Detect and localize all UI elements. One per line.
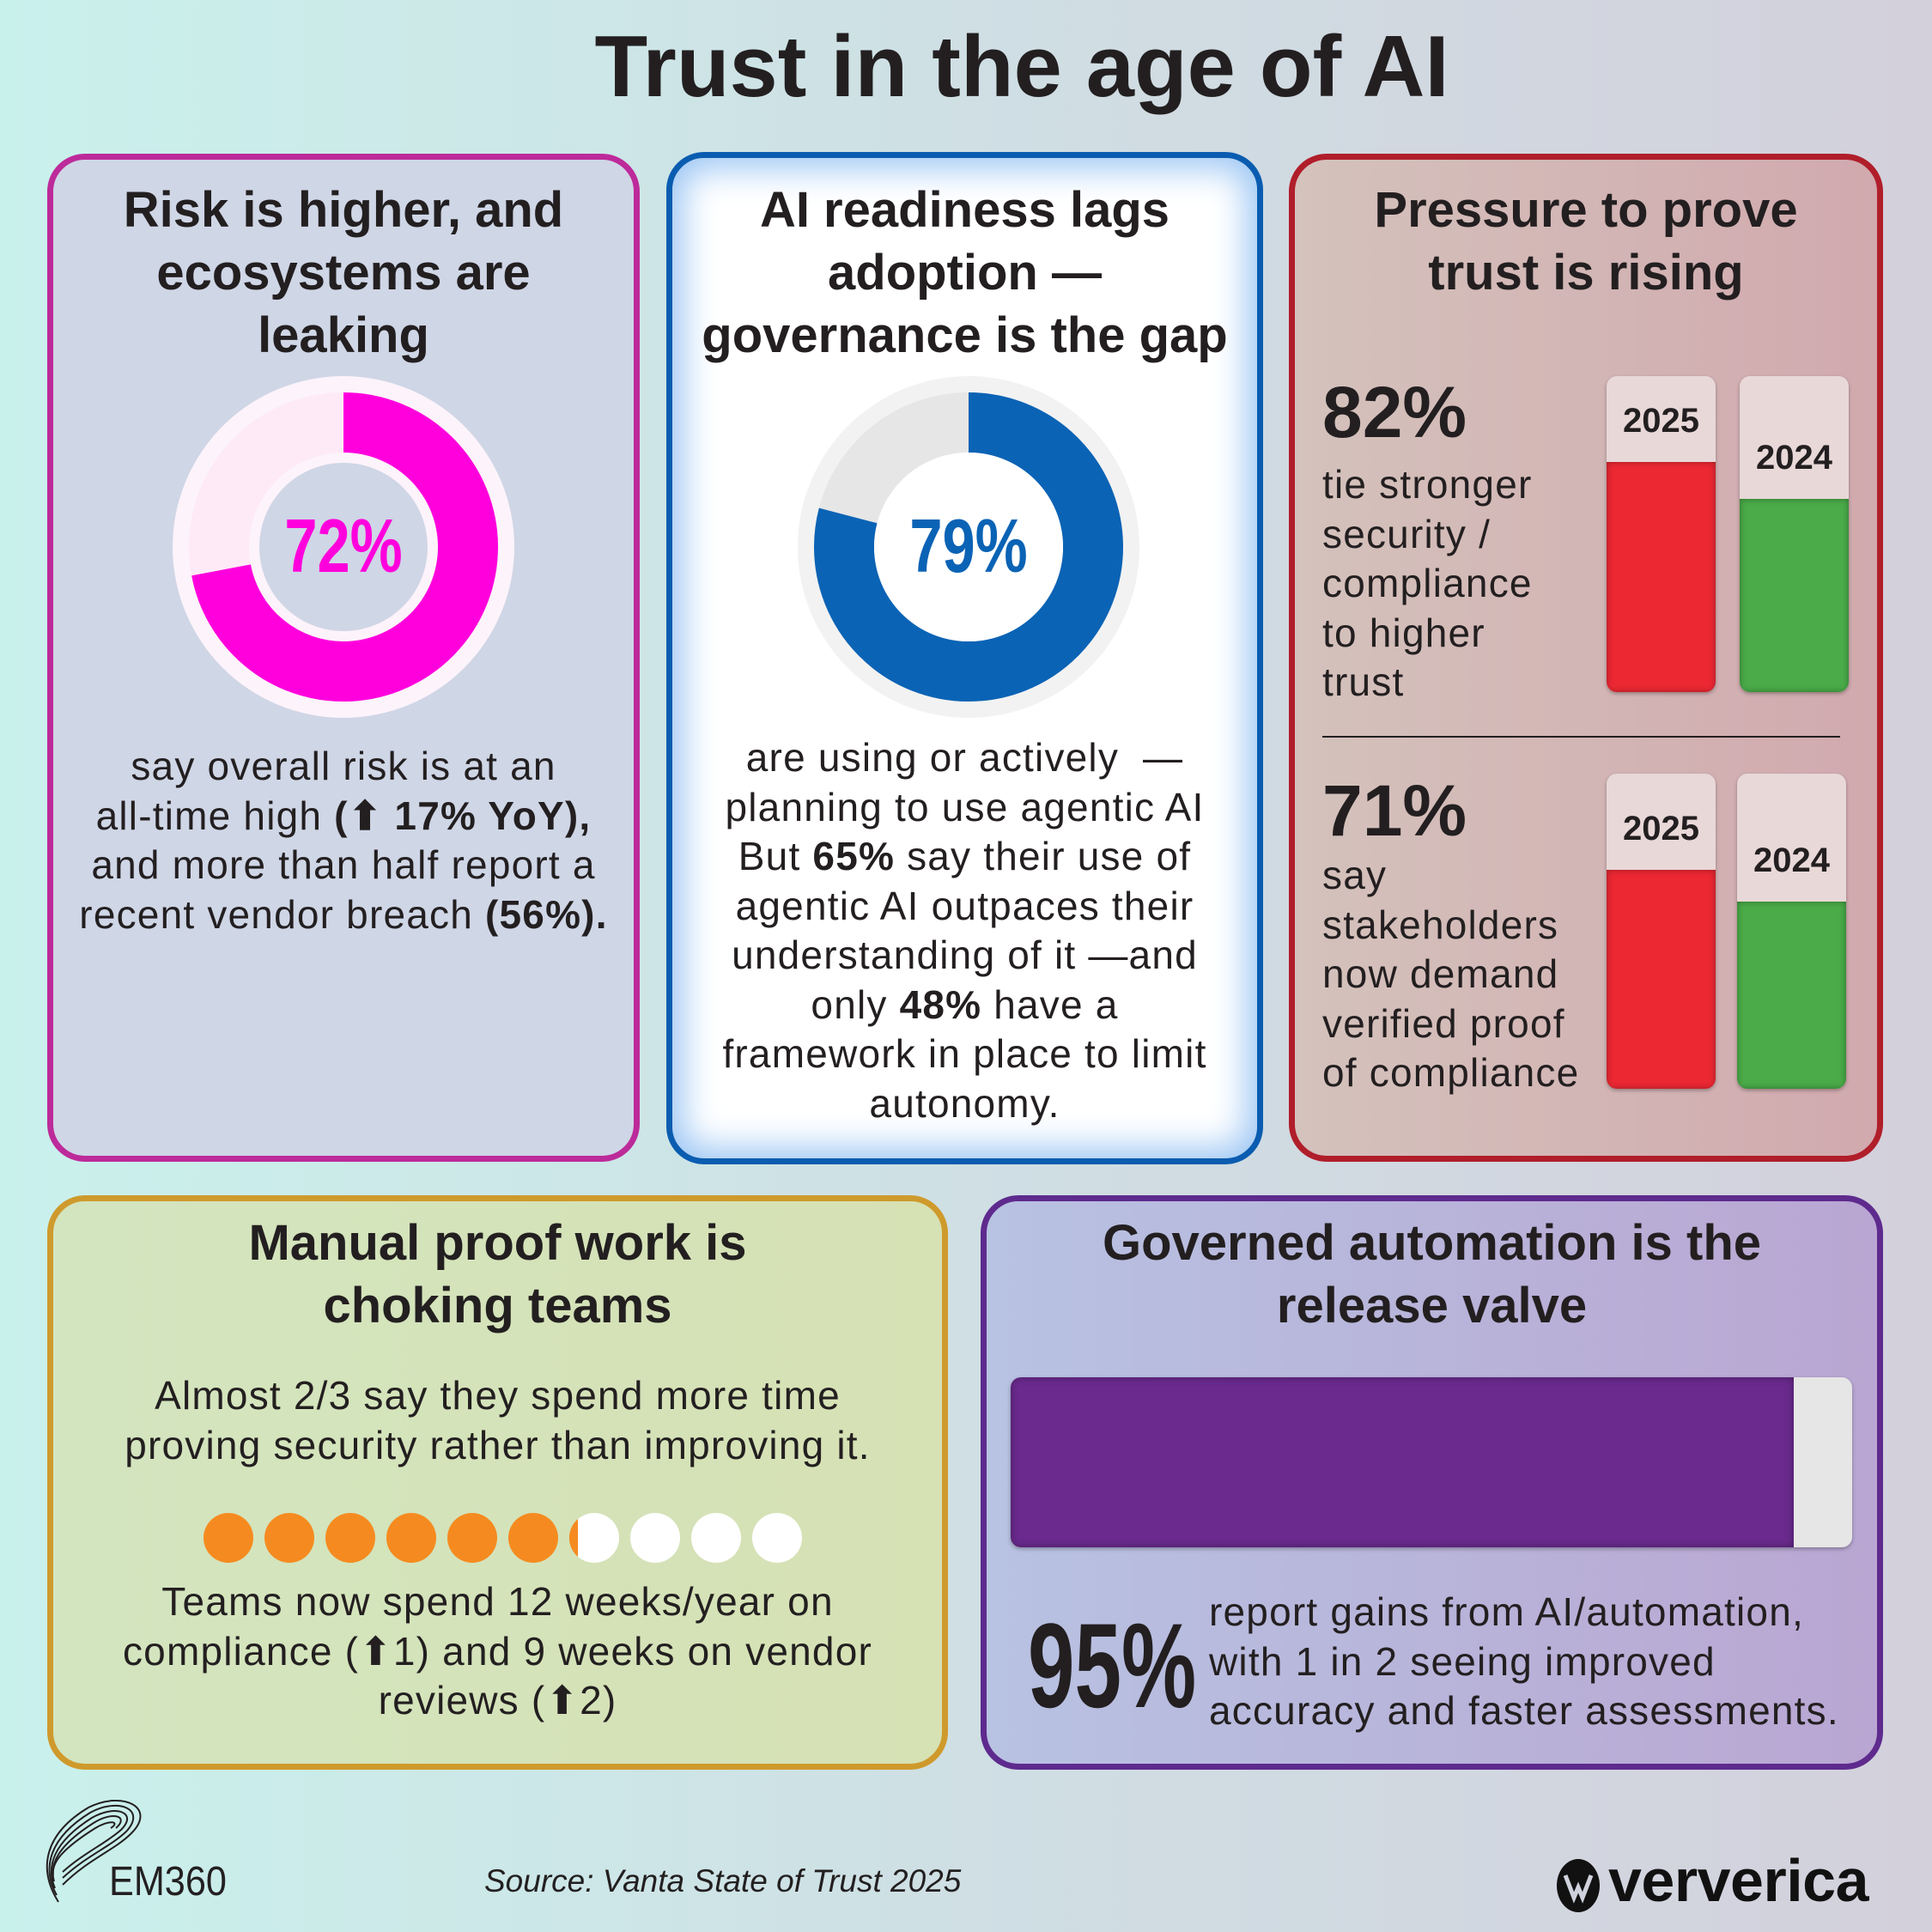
text: 71% description: verified proof <box>1322 1001 1565 1046</box>
text: AI readiness stats: framework in place to limit <box>722 1031 1207 1076</box>
text: risk stats: all-time high (⬆ 17% YoY), <box>96 793 591 838</box>
panel: AI readiness <box>666 152 1263 1164</box>
title: Trust in the age of AI <box>594 19 1449 115</box>
text: AI readiness stats <box>722 735 1207 1125</box>
text: 71% description: of compliance <box>1322 1050 1579 1095</box>
text: automation gains: report gains from AI/automation, <box>1209 1589 1804 1634</box>
text: weeks spent: compliance (⬆1) and 9 weeks on vendor <box>123 1628 872 1673</box>
bar: 2024 <box>1740 376 1849 692</box>
heading: risk: leaking <box>258 307 429 363</box>
text: 82% description: trust <box>1322 659 1404 704</box>
logo: EM360 <box>46 1800 227 1905</box>
donut chart 72%: 72% <box>284 504 403 588</box>
text: AI readiness stats: planning to use agentic AI <box>725 785 1205 829</box>
bar: 2024 (second): 2024 <box>1753 841 1830 879</box>
text: AI readiness stats: But 65% say their use of <box>738 834 1191 878</box>
text: 82% description: tie stronger <box>1322 462 1533 507</box>
text: AI readiness stats: only 48% have a <box>811 982 1119 1027</box>
heading: risk: Risk is higher, and <box>124 182 563 238</box>
heading: AI readiness: adoption — <box>828 245 1102 301</box>
text: 82% description <box>1322 462 1533 704</box>
panel: governed automation <box>981 1195 1883 1770</box>
panel: manual proof <box>47 1195 948 1770</box>
text: proving security <box>125 1373 871 1467</box>
heading: manual proof: Manual proof work is <box>248 1215 747 1271</box>
donut chart 79% <box>798 376 1139 718</box>
text: AI readiness stats: agentic AI outpaces their <box>736 883 1194 927</box>
logo: EM360: EM360 <box>109 1859 227 1905</box>
bar: 2024 (second) <box>1737 774 1846 1089</box>
bar: 2025 (82%): 2025 <box>1623 402 1699 440</box>
text: risk stats: and more than half report a <box>91 842 596 887</box>
text: automation gains <box>1209 1589 1839 1733</box>
text: 71% description <box>1322 853 1579 1095</box>
text: 71% description: say <box>1322 853 1387 897</box>
bar: 2025 (71%): 2025 <box>1623 810 1699 848</box>
text: 82% description: to higher <box>1322 610 1485 654</box>
text: weeks spent <box>123 1579 872 1722</box>
heading: manual proof: choking teams <box>323 1278 672 1334</box>
heading: pressure: trust is rising <box>1428 245 1744 301</box>
text: 71% description: stakeholders <box>1322 902 1558 946</box>
heading: risk: ecosystems are <box>156 245 531 301</box>
text: AI readiness stats: autonomy. <box>869 1080 1060 1125</box>
text: AI readiness stats: understanding of it —and <box>732 933 1198 977</box>
donut chart 72% <box>173 376 514 718</box>
stat 82%: 82% <box>1322 372 1467 453</box>
text: risk stats: say overall risk is at an <box>131 744 556 788</box>
text: 82% description: security / <box>1322 512 1491 556</box>
text: automation gains: accuracy and faster assessments. <box>1209 1688 1839 1733</box>
heading: governed automation: release valve <box>1277 1278 1587 1334</box>
heading: pressure <box>1374 182 1798 301</box>
bar chart 95% <box>1011 1377 1852 1547</box>
stat 71%: 71% <box>1322 770 1467 851</box>
stat 95%: 95% <box>1028 1598 1196 1733</box>
source text: Source: Vanta State of Trust 2025 <box>484 1863 961 1899</box>
heading: manual proof <box>248 1215 747 1334</box>
text: risk stats <box>79 744 608 936</box>
text: weeks spent: Teams now spend 12 weeks/year on <box>161 1579 834 1624</box>
heading: pressure: Pressure to prove <box>1374 182 1798 238</box>
text: weeks spent: reviews (⬆2) <box>379 1678 617 1722</box>
text: AI readiness stats: are using or actively — <box>746 735 1183 780</box>
heading: AI readiness <box>702 182 1228 363</box>
text: automation gains: with 1 in 2 seeing improved <box>1209 1638 1716 1683</box>
logo: ververica: ververica <box>1608 1847 1868 1914</box>
heading: AI readiness: AI readiness lags <box>760 182 1170 238</box>
text: 71% description: now demand <box>1322 951 1558 996</box>
heading: AI readiness: governance is the gap <box>702 307 1228 363</box>
dot chart: 2/3 <box>204 1513 802 1563</box>
text: proving security: Almost 2/3 say they spend more time <box>155 1373 841 1418</box>
heading: governed automation: Governed automation is the <box>1103 1215 1761 1271</box>
text: risk stats: recent vendor breach (56%). <box>79 891 608 936</box>
bar: 2025 (82%) <box>1607 376 1716 692</box>
panel: risk <box>47 154 640 1162</box>
heading: governed automation <box>1103 1215 1761 1334</box>
donut chart 79%: 79% <box>909 504 1028 588</box>
panel: pressure <box>1289 154 1883 1162</box>
heading: risk <box>124 182 563 363</box>
text: 82% description: compliance <box>1322 561 1533 605</box>
bar: 2025 (71%) <box>1607 774 1716 1089</box>
bar: 2024: 2024 <box>1756 439 1832 477</box>
text: proving security: proving security rather than improving it. <box>125 1422 871 1467</box>
